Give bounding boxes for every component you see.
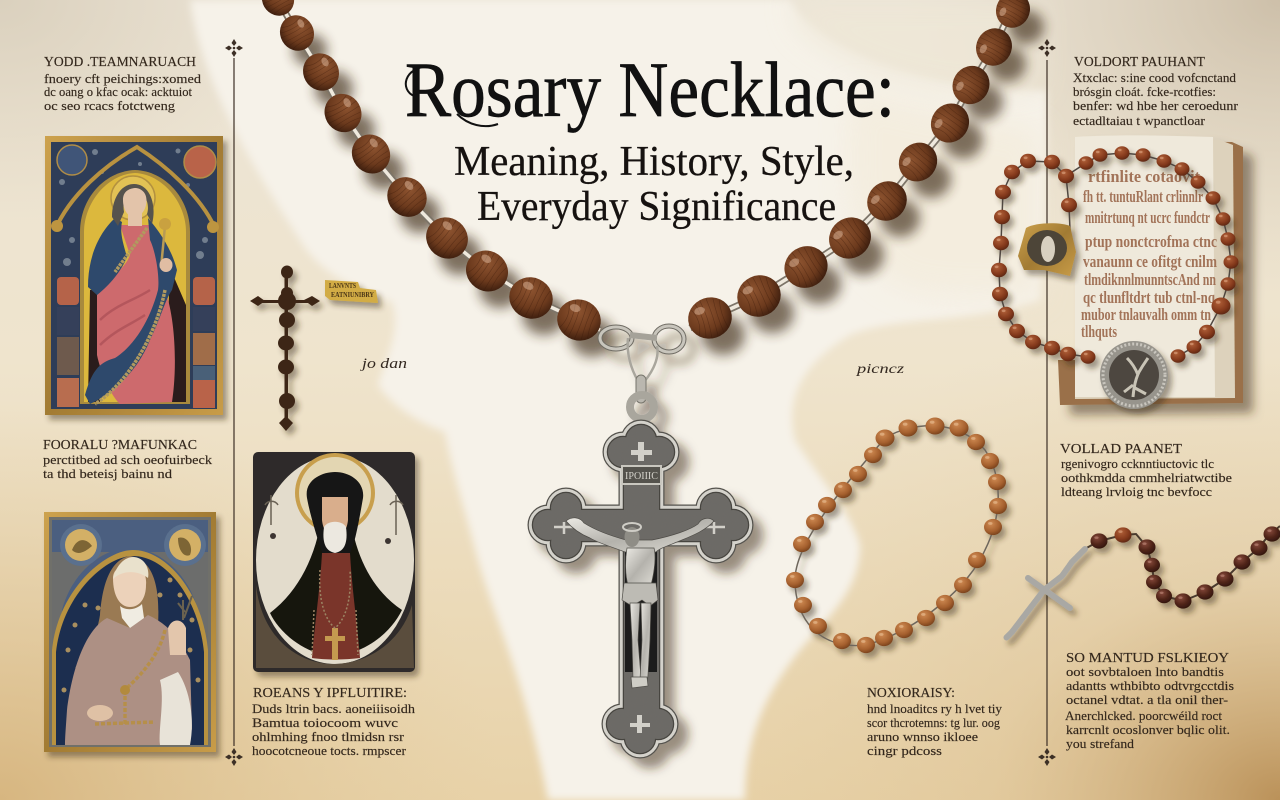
manuscript text bbox=[1081, 167, 1217, 341]
manuscript text: tlmdiknnlmunntscAnd nn bbox=[1084, 270, 1216, 289]
halo bbox=[111, 176, 155, 220]
text block: top right bbox=[1073, 55, 1239, 128]
text block: right bottom bbox=[1065, 651, 1234, 751]
cross silver rim bbox=[533, 425, 748, 753]
corner ornament bbox=[52, 552, 208, 700]
book bbox=[1058, 135, 1243, 405]
heading: NOXIORAISY: bbox=[867, 686, 955, 701]
silver medallion bbox=[1100, 341, 1168, 409]
orb bbox=[159, 218, 171, 230]
body: cingr pdcoss bbox=[867, 743, 942, 758]
manuscript text: qc tlunfltdrt tub ctnl-nq bbox=[1083, 288, 1215, 307]
gold arch niche bbox=[80, 170, 190, 404]
body: hoocotcneoue tocts. rmpscer bbox=[252, 743, 407, 758]
body: oothkmdda cmmhelriatwctibe bbox=[1061, 470, 1232, 485]
heading: VOLDORT PAUHANT bbox=[1074, 55, 1205, 70]
small top cross bbox=[631, 442, 652, 461]
dress fold bbox=[100, 290, 150, 345]
head cover bbox=[113, 557, 148, 579]
icon: fleuron bottom right bbox=[1038, 748, 1056, 766]
dress bbox=[97, 225, 175, 404]
banner: gold label: EATNIUNIBRY bbox=[331, 290, 374, 299]
hand lower bbox=[87, 705, 113, 721]
dress bbox=[65, 615, 192, 745]
label: map place left: jo dan bbox=[360, 356, 407, 372]
beads bbox=[1090, 526, 1280, 609]
manuscript text: mubor tnlauvalh omm tn bbox=[1081, 305, 1211, 324]
body bbox=[1073, 70, 1239, 128]
heading: FOORALU ?MAFUNKAC bbox=[43, 438, 197, 453]
body bbox=[43, 452, 213, 481]
left beads bbox=[256, 0, 607, 347]
necklace: wooden beads strand bbox=[256, 0, 1036, 347]
title bbox=[405, 46, 895, 230]
gothic arch bbox=[55, 147, 215, 230]
manuscript text: vanaunn ce ofitgt cnilm bbox=[1083, 252, 1217, 271]
panel: woman with rosary icon bbox=[44, 512, 216, 752]
heading: VOLLAD PAANET bbox=[1060, 442, 1182, 457]
crown bbox=[623, 523, 641, 531]
connector rings bbox=[600, 326, 684, 385]
lower bowl bbox=[256, 585, 414, 668]
shadow recess behind corpus bbox=[625, 547, 657, 672]
hood bbox=[307, 472, 363, 553]
pendant: crucifix bbox=[533, 326, 748, 753]
gold cross bbox=[325, 628, 345, 660]
body: hnd lnoaditcs ry h lvet tiy bbox=[867, 701, 1003, 716]
manuscript text: rtfinlite cotaovit bbox=[1088, 167, 1200, 186]
veil bbox=[112, 184, 154, 226]
oval ground bbox=[256, 456, 414, 664]
body: ldteang lrvloig tnc bevfocc bbox=[1061, 484, 1212, 499]
main title: Rosary Necklace: bbox=[405, 46, 895, 133]
left arm small cross bbox=[554, 522, 585, 534]
arch bbox=[52, 550, 208, 745]
cross inner field bbox=[533, 425, 748, 753]
bracelet of beads bbox=[786, 417, 1007, 653]
subtitle line two: Everyday Significance bbox=[477, 184, 836, 230]
panel: monk portrait icon bbox=[253, 452, 415, 672]
title text: IPOIIIC bbox=[625, 470, 658, 482]
text block: bottom middle bbox=[867, 686, 1003, 758]
banner: gold label: LANVNTS bbox=[329, 281, 356, 290]
text block: top left bbox=[44, 55, 202, 113]
cross inner outline bbox=[533, 425, 748, 753]
banner: gold label bbox=[325, 280, 378, 303]
body bbox=[1061, 456, 1232, 499]
eye ring bbox=[630, 395, 654, 419]
roundels bbox=[60, 524, 206, 566]
manuscript text: tlhquts bbox=[1081, 322, 1117, 341]
body: perctitbed ad sch oeofuirbeck bbox=[43, 452, 213, 467]
rosary around book bbox=[991, 146, 1238, 364]
body: aruno wnnso ikloee bbox=[867, 729, 978, 744]
hair bbox=[96, 556, 158, 642]
body: brósgin cloát. fcke-rcotfies: bbox=[1073, 84, 1216, 99]
text block: right middle bbox=[1060, 442, 1232, 499]
cloak left bbox=[88, 218, 127, 295]
body: ectadltaiau t wpanctloar bbox=[1073, 113, 1206, 128]
beads chain bbox=[312, 570, 358, 655]
body bbox=[867, 701, 1003, 758]
gold trim bbox=[95, 228, 165, 404]
body: fnoery cft peichings:xomed bbox=[44, 71, 202, 86]
side dots bbox=[270, 533, 391, 544]
cloak right and swoop bbox=[85, 218, 177, 404]
subtitle line one: Meaning, History, Style, bbox=[454, 139, 854, 185]
icon: fleuron top right bbox=[1038, 39, 1056, 57]
halo bbox=[295, 453, 375, 533]
label: map place right: picncz bbox=[856, 362, 905, 377]
cord bbox=[1083, 526, 1280, 601]
medal bbox=[120, 685, 130, 695]
panel: open manuscript with rosary bbox=[991, 135, 1243, 409]
red vestment bbox=[312, 553, 360, 660]
body: adantts wthbibto odtvrgcctdis bbox=[1066, 678, 1234, 693]
niche shadow bbox=[88, 268, 186, 402]
silver cross bbox=[1006, 549, 1085, 638]
divider rules bbox=[234, 58, 1047, 746]
body: oc seo rcacs fotctweng bbox=[44, 98, 176, 113]
manuscript text: mnitrtunq nt ucrc fundctr bbox=[1085, 208, 1210, 227]
head bbox=[624, 527, 640, 547]
face bbox=[123, 188, 147, 226]
swash on capital R bbox=[406, 66, 498, 126]
text block: left bottom bbox=[252, 686, 416, 758]
hand bbox=[160, 258, 172, 272]
stars bbox=[62, 578, 200, 692]
panel: Madonna icon bbox=[45, 136, 223, 415]
body: karrcnlt ocoslonver bqlic olit. bbox=[1066, 722, 1230, 737]
flower bbox=[178, 596, 192, 620]
body: rgenivogro ccknntiuctovic tlc bbox=[1061, 456, 1214, 471]
bail bbox=[636, 375, 646, 403]
heading: YODD .TEAMNARUACH bbox=[44, 55, 196, 70]
necklace shadow bbox=[293, 10, 1044, 357]
body: benfer: wd hbe her ceroedunr bbox=[1073, 98, 1239, 113]
icon: fleuron top left bbox=[225, 39, 243, 57]
beard bbox=[323, 522, 347, 553]
sleeve bbox=[160, 672, 192, 745]
body bbox=[44, 71, 202, 113]
hand bbox=[168, 620, 186, 655]
gold knots bbox=[51, 220, 219, 233]
manuscript text: fh tt. tuntuRlant crlinnlr bbox=[1083, 187, 1203, 206]
body: ohlmhing fnoo tlmidsn rsr bbox=[252, 729, 405, 744]
neck and collar bbox=[120, 604, 144, 628]
side ornaments bbox=[265, 495, 403, 535]
body bbox=[1065, 664, 1234, 751]
right beads bbox=[683, 0, 1036, 344]
heading: ROEANS Y IPFLUITIRE: bbox=[253, 686, 407, 701]
face bbox=[322, 497, 348, 535]
scepter bbox=[161, 226, 165, 268]
manuscript text: ptup nonctcrofma ctnc bbox=[1085, 232, 1217, 251]
face bbox=[113, 566, 146, 607]
right arm small cross bbox=[695, 522, 725, 534]
speckled ground bbox=[59, 148, 208, 266]
body: you strefand bbox=[1066, 736, 1135, 751]
title plate bbox=[622, 466, 661, 484]
rosary with silver cross bbox=[1006, 526, 1280, 638]
black robe bbox=[270, 515, 402, 657]
cross outer edge bbox=[533, 425, 748, 753]
body: oot sovbtaloen lnto bandtis bbox=[1066, 664, 1224, 679]
pale world map area bbox=[190, 0, 1047, 800]
gold medallion bbox=[1018, 223, 1076, 276]
body: dc oang o kfac ocak: acktuiot bbox=[44, 84, 192, 99]
body: octanel vdtat. a tla onil ther- bbox=[1066, 692, 1228, 707]
icon: small ornate cross bbox=[250, 266, 320, 431]
body: Duds ltrin bacs. aoneiiisoidh bbox=[252, 701, 416, 716]
icon: fleuron bottom left bbox=[225, 748, 243, 766]
chain links bbox=[275, 0, 1018, 330]
body: ta thd beteisj bainu nd bbox=[43, 466, 173, 481]
side panels bbox=[57, 277, 215, 408]
rosary strand bbox=[95, 630, 165, 725]
body bbox=[252, 701, 416, 758]
corpus bbox=[566, 518, 714, 688]
body: Bamtua toiocoom wuvc bbox=[252, 715, 398, 730]
body: Anerchlcked. poorcwéild roct bbox=[1065, 708, 1222, 723]
small bottom cross bbox=[630, 715, 650, 733]
body: scor thcrotemns: tg lur. oog bbox=[867, 715, 1000, 730]
body: Xtxclac: s:ine cood vofcnctand bbox=[1073, 70, 1237, 85]
heading: SO MANTUD FSLKIEOY bbox=[1066, 651, 1229, 666]
roundels bbox=[57, 145, 216, 178]
text block: left middle bbox=[43, 438, 213, 481]
